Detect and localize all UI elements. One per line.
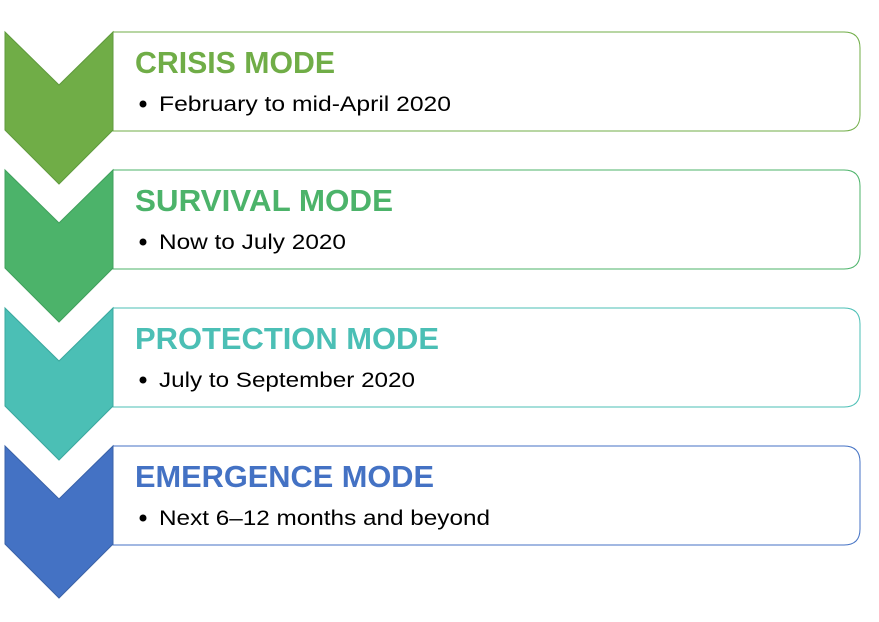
chevron: emergence (5, 446, 113, 598)
panel: survival (113, 170, 860, 269)
panel: crisis (113, 32, 860, 131)
chevron: survival (5, 170, 113, 322)
bullet: emergence dates: Next 6–12 months and beyond (159, 507, 490, 530)
panel: protection (113, 308, 860, 407)
chevron: crisis (5, 32, 113, 184)
chevron: protection (5, 308, 113, 460)
bullet: survival dates: Now to July 2020 (159, 231, 346, 254)
panel: emergence (113, 446, 860, 545)
title: survival mode: SURVIVAL MODE (135, 183, 393, 218)
step: survival mode (5, 170, 860, 322)
step: emergence mode (5, 446, 860, 598)
step: crisis mode (5, 32, 860, 184)
bullet: protection dates: July to September 2020 (159, 369, 415, 392)
title: protection mode: PROTECTION MODE (135, 321, 439, 356)
title: crisis mode: CRISIS MODE (135, 45, 335, 80)
step: protection mode (5, 308, 860, 460)
title: emergence mode: EMERGENCE MODE (135, 459, 434, 494)
bullet: crisis dates: February to mid-April 2020 (159, 93, 451, 116)
